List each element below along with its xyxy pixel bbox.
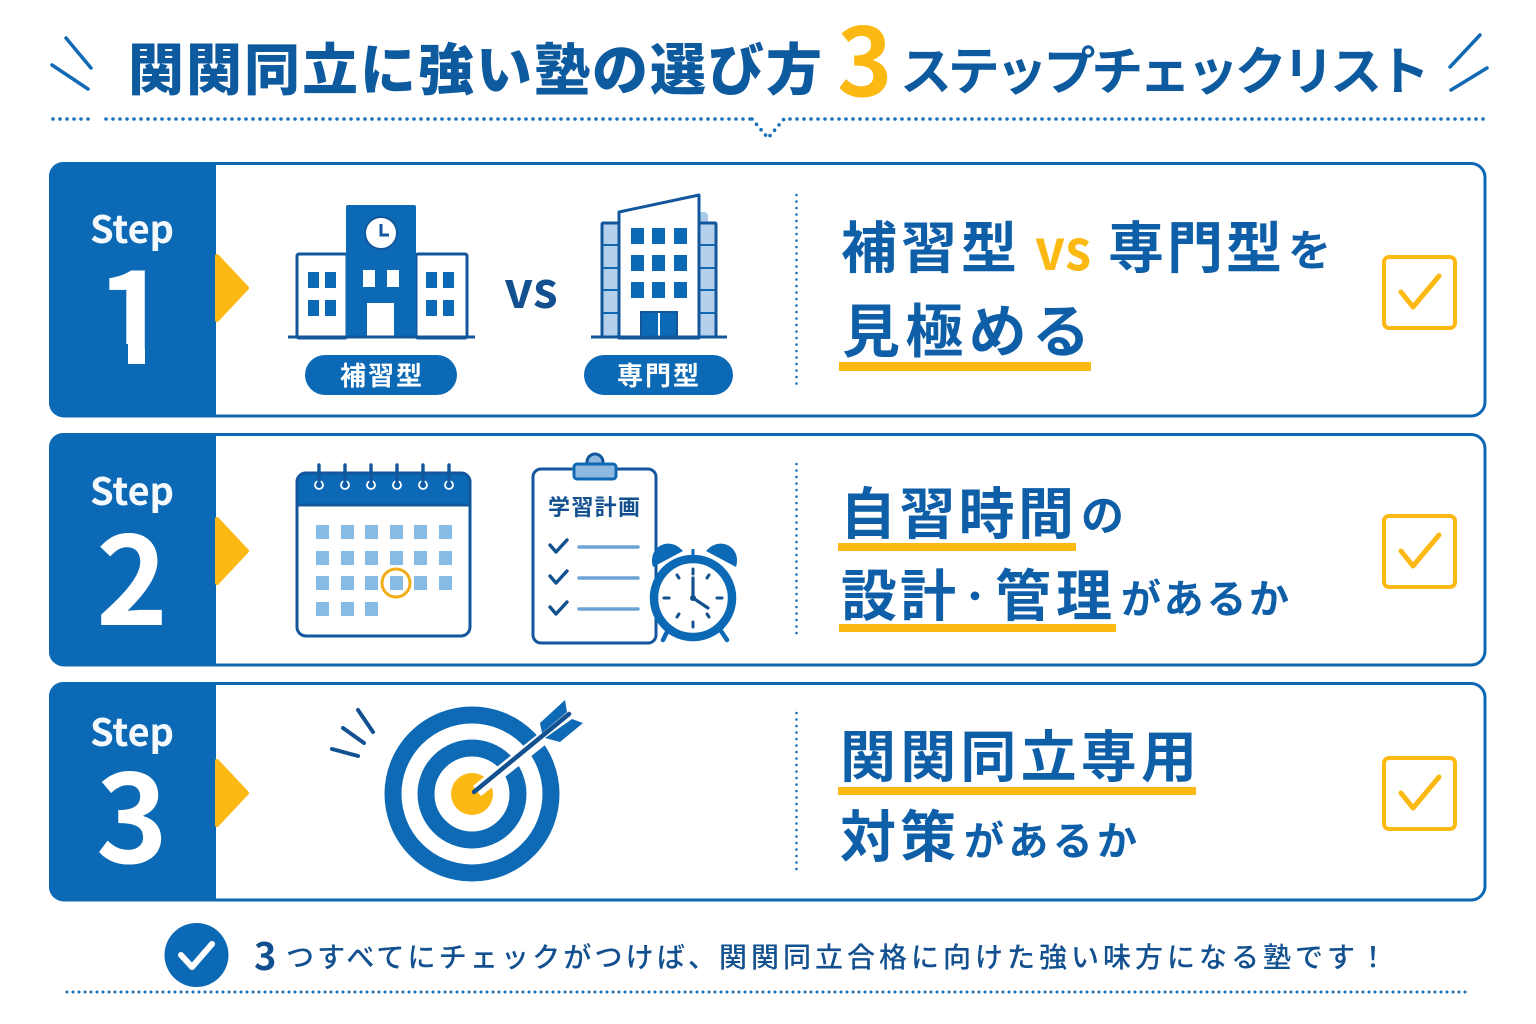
label: 専門型: 専門型 [617, 361, 699, 391]
label: 補習型 [305, 355, 457, 395]
text: step 1 heading: 補習型 [841, 217, 1017, 280]
text: step 1 heading: 専門型 [1108, 217, 1282, 280]
text: step 1 heading: vs [1035, 206, 1091, 287]
step 3 badge: Step [90, 702, 174, 757]
text: step 2 heading: 管理 [995, 565, 1112, 628]
checkbox 3 [1384, 758, 1455, 829]
text: step 3 heading [838, 726, 1197, 869]
text: step 1 heading: を [1288, 228, 1331, 276]
text: step 2 heading: 設計 [841, 565, 956, 628]
text: step 2 heading [838, 483, 1289, 632]
step 1 badge: Step [90, 199, 174, 254]
icon: study plan clipboard: 学習計画 [548, 495, 640, 520]
title: 関関同立に強い塾の選び方 [128, 39, 822, 102]
text: step 3 heading: 対策 [840, 806, 956, 869]
panel: step 1 [49, 162, 1485, 417]
footer message [254, 926, 1387, 981]
label: 補習型: 補習型 [340, 361, 422, 391]
step 2 badge: 2 [96, 484, 168, 661]
checkbox 2 [1384, 516, 1455, 587]
step 3 badge [49, 682, 247, 901]
vs label: vs [504, 251, 558, 323]
text: step 3 heading: 関関同立専用 [840, 726, 1197, 789]
step 3 badge: 3 [96, 722, 168, 899]
icon: footer check [164, 923, 228, 987]
icon: specialist school building [591, 195, 727, 338]
panel: step 2 [49, 433, 1485, 666]
text: step 2 heading: があるか [1121, 578, 1289, 622]
icon: calendar [297, 465, 470, 636]
panel: step 3 [49, 682, 1485, 901]
icon: target with arrow [332, 700, 583, 873]
text: step 2 heading: の [1081, 493, 1124, 541]
label: 専門型 [584, 355, 733, 395]
title: ステップチェックリスト [900, 44, 1430, 102]
icon: cram school building [288, 205, 475, 338]
accent lines: title left [52, 38, 91, 89]
title [128, 0, 1430, 124]
step 1 badge [49, 162, 247, 417]
step 2 badge: Step [90, 461, 174, 516]
footer message: 関関同立合格に向けた強い味方になる塾です！ [719, 942, 1387, 973]
footer message: つすべてにチェックがつけば、 [286, 942, 716, 973]
text: step 2 heading: ・ [958, 579, 992, 617]
text: step 1 heading [839, 206, 1331, 371]
text: step 2 heading: 自習時間 [840, 483, 1074, 546]
text: step 1 heading: 見極める [842, 300, 1090, 365]
text: step 3 heading: があるか [964, 820, 1137, 864]
icon: study plan clipboard [533, 454, 656, 643]
footer message: 3 [254, 926, 276, 981]
checkbox 1 [1384, 257, 1455, 328]
step 2 badge [49, 433, 247, 666]
accent lines: title right [1450, 35, 1487, 90]
step 1 badge: 1 [96, 219, 170, 401]
icon: alarm clock [652, 544, 737, 640]
